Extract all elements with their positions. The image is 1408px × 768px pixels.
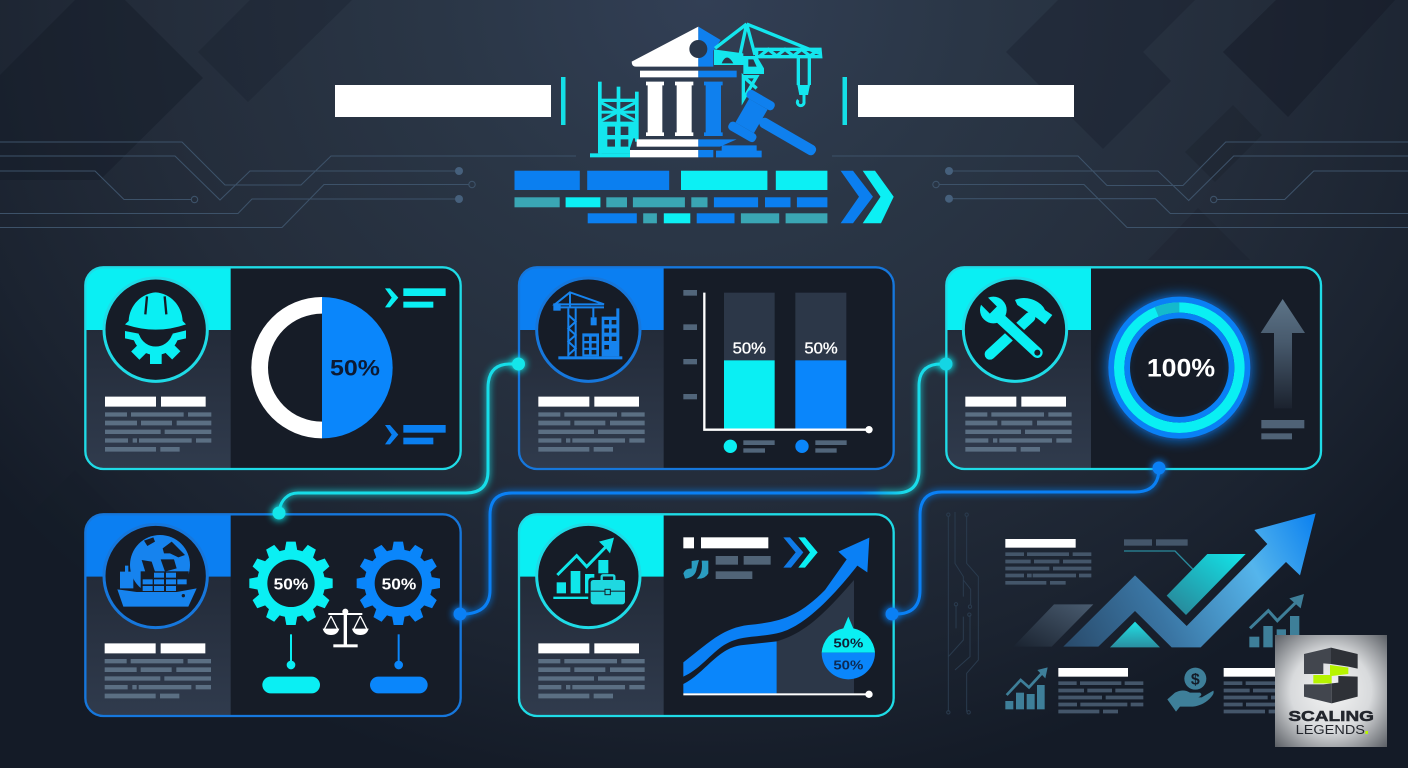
title bar right [858, 85, 1074, 117]
crane [715, 24, 821, 99]
text block top [1005, 539, 1091, 585]
callout: 50 percent drop: 50% [833, 658, 863, 673]
donut chart 50 percent [251, 297, 393, 438]
donut chart 50 percent: 50% [330, 356, 380, 381]
icon: hand holding coin [1167, 668, 1214, 712]
icon: growth chart and briefcase [537, 524, 640, 628]
panel: tools 100 percent [946, 267, 1321, 469]
note with chevrons [683, 537, 818, 579]
legend bottom [385, 425, 446, 444]
callout label [1124, 539, 1193, 569]
progress ring 100 percent [1111, 299, 1247, 436]
icon: wrench and hammer [963, 278, 1067, 381]
text block bottom left [1058, 668, 1143, 713]
logo: Scaling Legends [1275, 635, 1387, 747]
logo: Scaling Legends: LEGENDS [1296, 722, 1365, 737]
icon: hard hat and gear [104, 278, 207, 381]
gavel [727, 88, 827, 173]
callout: 50 percent drop [822, 617, 875, 679]
title divider left [561, 77, 566, 125]
panel: safety gear 50 percent [85, 267, 461, 469]
circuit lines: left [0, 142, 576, 228]
bar chart: 50% [733, 341, 766, 358]
pediment [632, 27, 698, 67]
base steps [637, 139, 698, 147]
gear chart cyan: 50% [274, 576, 308, 593]
title bar left [335, 85, 551, 117]
icon: small bar chart [1005, 667, 1048, 709]
callout: 50 percent drop: 50% [833, 635, 863, 650]
connector nodes [271, 356, 1167, 622]
chevron arrows: header [841, 171, 894, 223]
gear chart blue: 50% [382, 576, 416, 593]
bar chart: 50% [804, 341, 838, 358]
growth arrow graphic [1013, 513, 1316, 647]
icon: hand holding coin: $ [1191, 672, 1200, 689]
icon: balance scales [323, 609, 369, 647]
circuit lines: right [832, 142, 1408, 228]
text block [538, 643, 645, 698]
icon: mini growth chart [1249, 594, 1304, 647]
text block [105, 643, 211, 698]
icon: crane and buildings [537, 278, 640, 381]
legend top [385, 288, 446, 308]
text block [965, 397, 1072, 452]
arrow: upward growth [1261, 299, 1305, 439]
panel: growth summary with arrow [947, 512, 1387, 747]
beam [640, 71, 698, 77]
area chart with growth arrow [683, 538, 873, 698]
brick pattern bars [514, 171, 827, 223]
icon: globe and cargo ship [104, 524, 207, 628]
gear chart cyan [249, 542, 333, 693]
decorative circuit column [947, 512, 978, 714]
text block [538, 397, 645, 452]
connector lines [279, 364, 1159, 614]
scaffold building [590, 82, 639, 157]
bar chart [683, 290, 873, 453]
progress ring 100 percent: 100% [1147, 355, 1215, 383]
panel: growth curve [519, 514, 894, 716]
logo: Scaling Legends: SCALING [1288, 709, 1374, 725]
text block [105, 397, 211, 452]
panel: global trade gears [85, 514, 461, 716]
icon: courthouse, crane, scaffold and gavel [590, 24, 827, 173]
title divider right [842, 77, 847, 125]
panel: construction 50 percent bars [519, 267, 894, 469]
gear chart blue [357, 542, 440, 693]
text block bottom right [1224, 668, 1277, 713]
columns [646, 82, 693, 136]
